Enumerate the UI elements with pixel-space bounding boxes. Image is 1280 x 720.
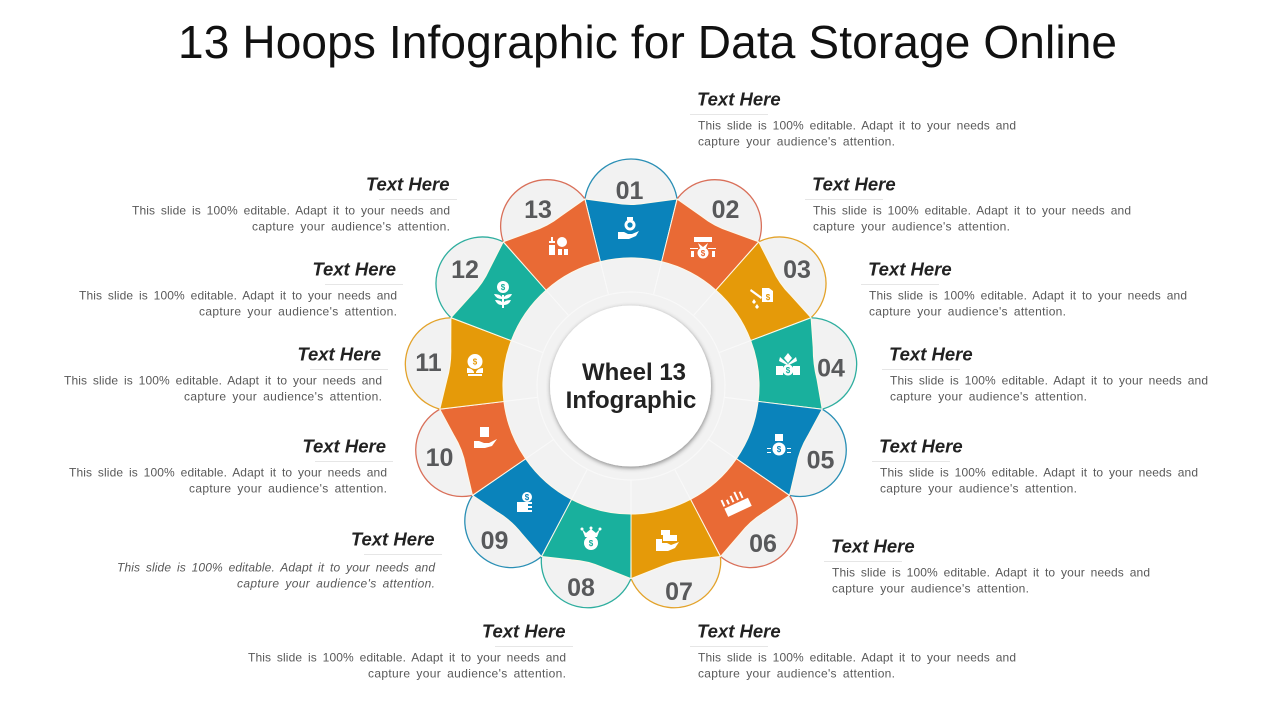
text block 09: [117, 528, 442, 590]
text block 06: Text Here: [831, 536, 915, 556]
segment numbers: 06: [749, 530, 777, 558]
text block 11: capture your audience's attention.: [184, 390, 382, 404]
text block 04: This slide is 100% editable. Adapt it to your needs and: [890, 374, 1208, 388]
segment numbers: 03: [783, 256, 811, 284]
text block 02: capture your audience's attention.: [813, 220, 1010, 234]
icon: watering can: $: [766, 293, 771, 302]
text block 02: This slide is 100% editable. Adapt it to your needs and: [813, 204, 1131, 218]
text block 04: capture your audience's attention.: [890, 390, 1087, 404]
segment numbers: [415, 177, 845, 606]
text block 06: [824, 536, 1150, 596]
icon: hand with boxes: [656, 530, 679, 551]
text block 01: [690, 88, 1016, 148]
segment numbers: 11: [415, 349, 442, 377]
icon: money plant: [494, 281, 512, 308]
text block 04: Text Here: [889, 344, 973, 364]
text block 07: Text Here: [697, 620, 781, 642]
text block 04: [882, 344, 1208, 404]
title: 13 Hoops Infographic for Data Storage Online: [178, 16, 1117, 68]
text block 10: This slide is 100% editable. Adapt it to your needs and: [69, 466, 387, 480]
icon: money plant: $: [501, 283, 506, 292]
text block 05: capture your audience's attention.: [880, 482, 1077, 496]
text block 01: This slide is 100% editable. Adapt it to your needs and: [698, 118, 1016, 132]
icon: coin with crown: [580, 526, 602, 550]
segment numbers: 09: [481, 527, 508, 555]
text block 07: This slide is 100% editable. Adapt it to your needs and: [698, 650, 1016, 664]
icon: money bag with hand: [767, 434, 791, 456]
text block 03: [861, 258, 1187, 318]
text block 09: Text Here: [351, 528, 434, 550]
text block 11: Text Here: [297, 344, 381, 364]
text block 06: capture your audience's attention.: [832, 582, 1029, 596]
icon: money plant in pot: $: [473, 358, 478, 366]
text block 07: capture your audience's attention.: [698, 666, 895, 680]
hoop circles: [400, 159, 862, 618]
grey ring: [502, 257, 760, 515]
text block 03: capture your audience's attention.: [869, 304, 1066, 318]
text block 13: This slide is 100% editable. Adapt it to your needs and: [132, 204, 450, 218]
icon: coins and plant: [549, 237, 568, 255]
icon: coin with leaves: $: [701, 249, 706, 258]
text block 01: capture your audience's attention.: [698, 134, 895, 148]
icon: money bag with hand: $: [777, 445, 782, 454]
icon: coin with leaves: [690, 237, 716, 258]
segment numbers: 02: [712, 196, 739, 224]
centre label: Wheel 13: [582, 359, 686, 386]
text block 03: This slide is 100% editable. Adapt it to your needs and: [869, 288, 1187, 302]
segment numbers: 04: [817, 354, 845, 382]
segment numbers: 10: [426, 444, 453, 472]
text block 13: [132, 174, 457, 234]
segment numbers: 08: [567, 574, 595, 602]
text block 08: [248, 620, 573, 680]
text block 02: [805, 174, 1131, 234]
icon: plant on coins: $: [786, 366, 791, 375]
segment numbers: 05: [807, 446, 834, 474]
text block 08: capture your audience's attention.: [368, 666, 566, 680]
text block 12: This slide is 100% editable. Adapt it to your needs and: [79, 288, 397, 302]
text block 05: Text Here: [879, 436, 963, 456]
text block 02: Text Here: [812, 174, 896, 194]
text block 11: [64, 344, 388, 404]
text block 05: [872, 436, 1198, 496]
icon: hand with money bag: [618, 217, 639, 239]
segment numbers: 07: [665, 578, 693, 606]
text block 10: [69, 436, 393, 496]
segment numbers: 13: [524, 196, 552, 224]
icon: fist with coin: $: [525, 493, 530, 502]
text block 11: This slide is 100% editable. Adapt it to your needs and: [64, 374, 382, 388]
centre label: Infographic: [566, 387, 696, 414]
icon: hand with banknote: [474, 427, 497, 448]
text block 08: This slide is 100% editable. Adapt it to your needs and: [248, 650, 566, 664]
text block 09: capture your audience's attention.: [237, 576, 435, 590]
text block 05: This slide is 100% editable. Adapt it to your needs and: [880, 466, 1198, 480]
text block 09: This slide is 100% editable. Adapt it to your needs and: [117, 560, 435, 574]
icon: fist with coin: [517, 492, 532, 512]
text block 06: This slide is 100% editable. Adapt it to your needs and: [832, 566, 1150, 580]
icon: banknotes and chart: [720, 488, 752, 517]
icon: coin with crown: $: [589, 539, 594, 548]
centre circle: [550, 306, 711, 466]
segment icons: [467, 217, 800, 551]
icon: watering can: [750, 288, 773, 309]
centre label: [566, 359, 696, 414]
text block 10: Text Here: [302, 436, 386, 456]
text block 08: Text Here: [482, 620, 566, 642]
text block 12: Text Here: [312, 258, 396, 280]
text block 12: [79, 258, 403, 318]
segment numbers: 01: [616, 177, 643, 205]
segment numbers: 12: [451, 256, 479, 284]
coloured segments: [440, 199, 822, 579]
text block 12: capture your audience's attention.: [199, 304, 397, 318]
text block 07: [690, 620, 1016, 680]
icon: plant on coins: [776, 353, 800, 376]
text block 13: capture your audience's attention.: [252, 220, 450, 234]
text block 03: Text Here: [868, 258, 952, 280]
icon: money plant in pot: [467, 354, 483, 376]
text block 10: capture your audience's attention.: [189, 482, 387, 496]
text block 01: Text Here: [697, 88, 781, 110]
text block 13: Text Here: [366, 174, 450, 194]
wheel: [400, 159, 862, 618]
